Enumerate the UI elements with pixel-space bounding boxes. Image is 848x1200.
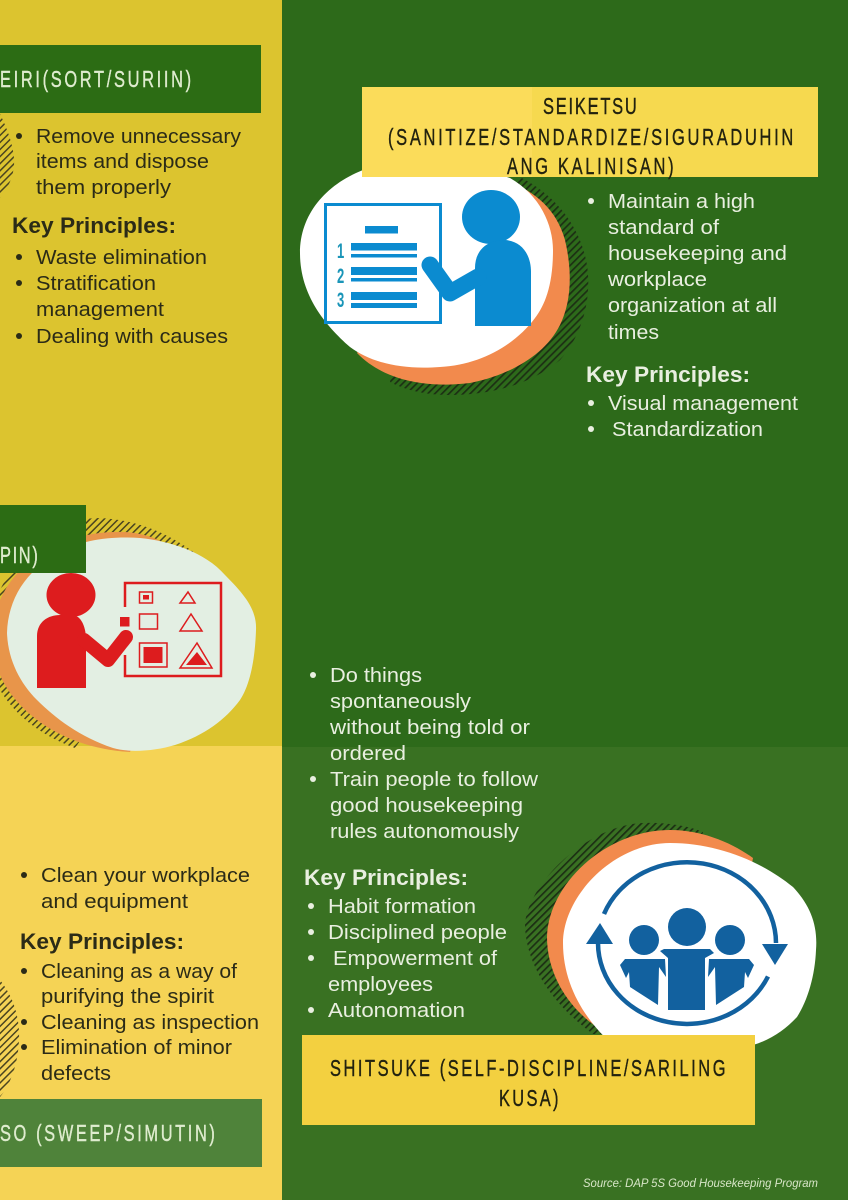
list: seiri principles bbox=[16, 246, 228, 348]
text block: seiketsu description: times bbox=[608, 321, 659, 344]
list: shitsuke principles: Autonomation bbox=[328, 999, 465, 1022]
text block: seiso description: Clean your workplace bbox=[41, 864, 250, 887]
panel: background green bottom bbox=[282, 747, 848, 1200]
list: seiso principles bbox=[21, 960, 259, 1085]
heading: seiketsu bbox=[362, 87, 818, 180]
heading: seiketsu: ANG KALINISAN) bbox=[507, 154, 674, 180]
hatch: seiri blob edge bbox=[0, 114, 14, 198]
list: seiso principles: Cleaning as inspection bbox=[41, 1011, 259, 1034]
text block: shitsuke description: spontaneously bbox=[330, 690, 472, 713]
heading: shitsuke: SHITSUKE (SELF-DISCIPLINE/SARILING bbox=[330, 1056, 726, 1082]
text block: seiri description: Remove unnecessary bbox=[36, 125, 242, 148]
hatch: seiton blob shadow bbox=[0, 518, 195, 748]
heading: seiso bbox=[0, 1099, 262, 1167]
heading: seiso key principles: Key Principles: bbox=[20, 929, 184, 954]
text block: seiri description: items and dispose bbox=[36, 150, 209, 173]
heading: seiketsu: (SANITIZE/STANDARDIZE/SIGURADUHIN bbox=[388, 125, 793, 151]
hatch: shitsuke blob shadow bbox=[525, 823, 703, 1034]
text block: shitsuke description: ordered bbox=[330, 742, 406, 765]
list: seiketsu principles: Visual management bbox=[608, 392, 798, 415]
heading: seiton bbox=[0, 505, 86, 573]
heading: seiso: SO (SWEEP/SIMUTIN) bbox=[0, 1121, 215, 1147]
panel: background yellow top bbox=[0, 0, 282, 746]
heading: seiri key principles: Key Principles: bbox=[12, 213, 176, 238]
list: seiso principles: purifying the spirit bbox=[41, 985, 214, 1008]
blob: seiton white bbox=[7, 538, 256, 751]
list: seiri principles: Waste elimination bbox=[36, 246, 207, 269]
text block: seiketsu description: organization at all bbox=[608, 294, 777, 317]
list: seiso principles: Elimination of minor bbox=[41, 1036, 232, 1059]
text block: shitsuke description: Train people to follow bbox=[330, 768, 538, 791]
heading: seiton: PIN) bbox=[0, 543, 38, 569]
heading: shitsuke: KUSA) bbox=[499, 1086, 559, 1112]
text block: seiketsu description bbox=[588, 190, 787, 344]
panel: seiso bbox=[0, 864, 262, 1167]
text block: seiri description: them properly bbox=[36, 176, 172, 199]
list: shitsuke principles: Empowerment of bbox=[333, 947, 497, 970]
text block: shitsuke description: Do things bbox=[330, 664, 422, 687]
list: seiketsu principles bbox=[588, 392, 798, 441]
list: shitsuke principles: employees bbox=[328, 973, 433, 996]
text block: seiketsu description: standard of bbox=[608, 216, 719, 239]
list: seiso principles: defects bbox=[41, 1062, 111, 1085]
blob: seiketsu white bbox=[300, 166, 553, 368]
blob: seiketsu orange bbox=[357, 177, 570, 385]
list: shitsuke principles bbox=[308, 895, 507, 1022]
list: seiketsu principles: Standardization bbox=[612, 418, 763, 441]
blob: shitsuke white bbox=[563, 843, 816, 1045]
icon: person with checklist: 1 bbox=[337, 239, 344, 263]
heading: seiketsu: SEIKETSU bbox=[543, 94, 637, 120]
heading: seiketsu key principles: Key Principles: bbox=[586, 362, 750, 387]
list: seiri principles: management bbox=[36, 298, 164, 321]
panel: background yellow bottom bbox=[0, 746, 282, 1200]
text block: shitsuke description: rules autonomously bbox=[330, 820, 520, 843]
hatch: seiketsu blob shadow bbox=[390, 177, 588, 395]
icon: person sorting shapes bbox=[37, 573, 221, 688]
blob: shitsuke orange bbox=[547, 830, 753, 1036]
text block: shitsuke description: without being told or bbox=[329, 716, 530, 739]
heading: seiri bbox=[0, 45, 261, 113]
panel: background green top bbox=[282, 0, 848, 747]
blob: seiton orange bbox=[0, 532, 200, 752]
heading: shitsuke bbox=[302, 1035, 755, 1125]
panel: seiketsu bbox=[300, 87, 818, 441]
hatch: seiso blob edge bbox=[0, 980, 19, 1097]
text block: seiketsu description: Maintain a high bbox=[608, 190, 755, 213]
text block: seiso description: and equipment bbox=[41, 890, 188, 913]
list: seiso principles: Cleaning as a way of bbox=[41, 960, 237, 983]
source note: Source: DAP 5S Good Housekeeping Program bbox=[583, 1176, 818, 1190]
heading: shitsuke key principles: Key Principles: bbox=[304, 865, 468, 890]
icon: person with checklist: 3 bbox=[337, 288, 344, 312]
list: shitsuke principles: Disciplined people bbox=[328, 921, 507, 944]
panel: seiton bbox=[0, 505, 256, 752]
text block: seiso description bbox=[21, 864, 250, 913]
list: shitsuke principles: Habit formation bbox=[328, 895, 476, 918]
text block: shitsuke description bbox=[310, 664, 538, 843]
panel: shitsuke bbox=[302, 664, 816, 1125]
text block: seiri description bbox=[16, 125, 242, 199]
icon: people in cycle bbox=[586, 862, 788, 1024]
panel: seiri bbox=[0, 45, 261, 348]
icon: person with checklist: 2 bbox=[337, 264, 344, 288]
text block: seiketsu description: housekeeping and bbox=[608, 242, 787, 265]
list: seiri principles: Stratification bbox=[36, 272, 156, 295]
list: seiri principles: Dealing with causes bbox=[36, 325, 228, 348]
text block: seiketsu description: workplace bbox=[607, 268, 707, 291]
heading: seiri: EIRI(SORT/SURIIN) bbox=[0, 67, 191, 93]
icon: person with checklist bbox=[326, 190, 531, 326]
text block: shitsuke description: good housekeeping bbox=[330, 794, 523, 817]
